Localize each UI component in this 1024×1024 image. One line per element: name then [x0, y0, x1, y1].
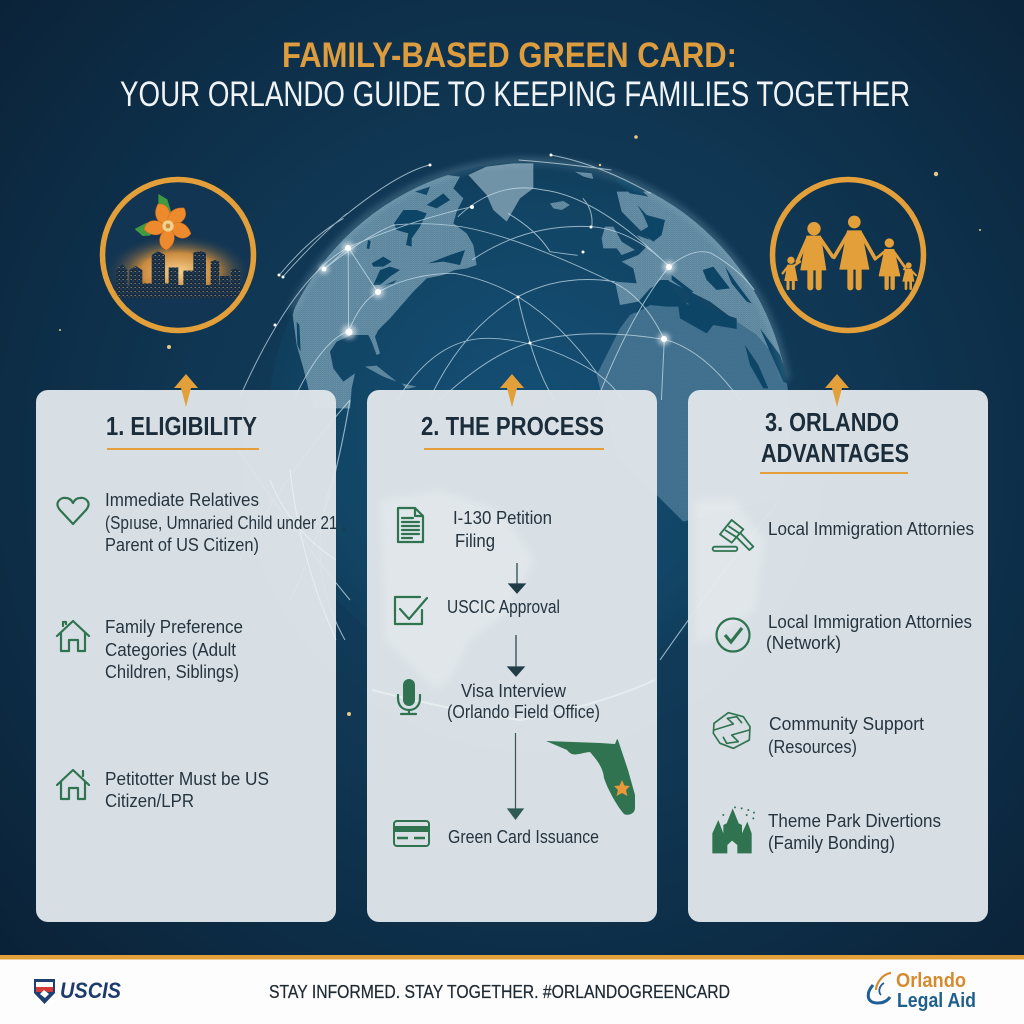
- arrow: step 3 to 4: [508, 733, 523, 819]
- panel: eligibility: [36, 374, 346, 922]
- title: FAMILY-BASED GREEN CARD:: [282, 36, 737, 75]
- text: family preference: Categories (Adult: [105, 640, 236, 660]
- text: community support: (Resources): [768, 737, 857, 757]
- text: petitioner requirement: Citizen/LPR: [105, 791, 194, 811]
- text: community support: Community Support: [769, 714, 924, 734]
- footer: [0, 955, 1024, 1024]
- text: attorney network: [766, 612, 972, 653]
- text: immediate relatives: (Spıuse, Umnaried Child under 21 ,: [105, 513, 346, 533]
- text: visa interview: [447, 681, 600, 722]
- icon: document: [398, 508, 423, 542]
- icon: checkbox: [395, 597, 427, 624]
- text: theme park: [768, 811, 941, 853]
- text: visa interview: (Orlando Field Office): [447, 702, 600, 722]
- text: green card issuance: Green Card Issuance: [448, 827, 599, 847]
- bright network nodes: [274, 154, 675, 345]
- text: family preference: [105, 617, 243, 682]
- icon: check circle: [716, 618, 750, 652]
- icon: microphone: [398, 679, 420, 714]
- globe: [238, 154, 817, 684]
- arrow: eligibility pointer: [174, 374, 198, 407]
- network arcs in globe-crop coordinates: [240, 155, 754, 400]
- text: family preference: Children, Siblings): [105, 662, 239, 682]
- logo: Orlando Legal Aid: Legal Aid: [897, 990, 976, 1012]
- arrow: process pointer: [500, 374, 524, 407]
- heading: the process: 2. THE PROCESS: [421, 411, 604, 441]
- arrow: advantages pointer: [825, 374, 849, 407]
- text: petitioner requirement: [105, 769, 269, 811]
- icon: house: [57, 770, 89, 799]
- icon: green card: [394, 821, 429, 846]
- icon: gavel: [713, 520, 753, 551]
- text: local immigration attorneys: Local Immigration Attornies: [768, 519, 974, 539]
- icon: family holding hands: [772, 180, 924, 330]
- text: USCIC approval: USCIC Approval: [447, 597, 560, 617]
- heading: eligibility: 1. ELIGIBILITY: [106, 411, 257, 441]
- logo: USCIS: USCIS: [60, 978, 121, 1003]
- text: immediate relatives: Parent of US Citizen): [105, 535, 259, 555]
- logo: Orlando Legal Aid: [868, 970, 976, 1012]
- land: Americas and Greenland: [293, 163, 533, 408]
- panel: the process: [367, 374, 657, 922]
- heading: Orlando advantages: [761, 407, 909, 468]
- tagline: STAY INFORMED. STAY TOGETHER. #ORLANDOGREENCARD: [269, 981, 730, 1002]
- arrow: step 1 to 2: [509, 563, 525, 593]
- text: community support: [768, 714, 924, 757]
- heading: Orlando advantages: 3. ORLANDO: [765, 407, 899, 437]
- text: I-130: I-130 Petition: [453, 508, 552, 528]
- icon: handshake: [713, 713, 750, 748]
- stars: [59, 135, 981, 716]
- text: theme park: (Family Bonding): [768, 833, 895, 853]
- map: Florida with Orlando star: [546, 739, 635, 815]
- arrow: step 2 to 3: [508, 635, 524, 676]
- title: [120, 36, 910, 114]
- text: attorney network: Local Immigration Attornies: [768, 612, 972, 632]
- panel: Orlando advantages: [688, 374, 988, 922]
- land: Europe, Asia and Africa: [550, 172, 788, 522]
- icon: heart: [58, 498, 88, 524]
- text: petitioner requirement: Petitotter Must be US: [105, 769, 269, 789]
- text: family preference: Family Preference: [105, 617, 243, 637]
- text: theme park: Theme Park Divertions: [768, 811, 941, 831]
- logo: Orlando Legal Aid: Orlando: [896, 970, 966, 992]
- logo: USCIS: [34, 978, 121, 1004]
- text: immediate relatives: Immediate Relatives: [105, 490, 259, 510]
- text: visa interview: Visa Interview: [461, 681, 567, 701]
- icon: castle: [712, 806, 755, 853]
- text: attorney network: (Network): [766, 633, 841, 653]
- text: I-130: Filing: [455, 531, 495, 551]
- icon: orange blossom over city skyline: [102, 179, 254, 331]
- icon: house: [57, 621, 89, 651]
- text: I-130: [453, 508, 552, 551]
- heading: Orlando advantages: ADVANTAGES: [761, 438, 909, 468]
- text: immediate relatives: [105, 490, 346, 555]
